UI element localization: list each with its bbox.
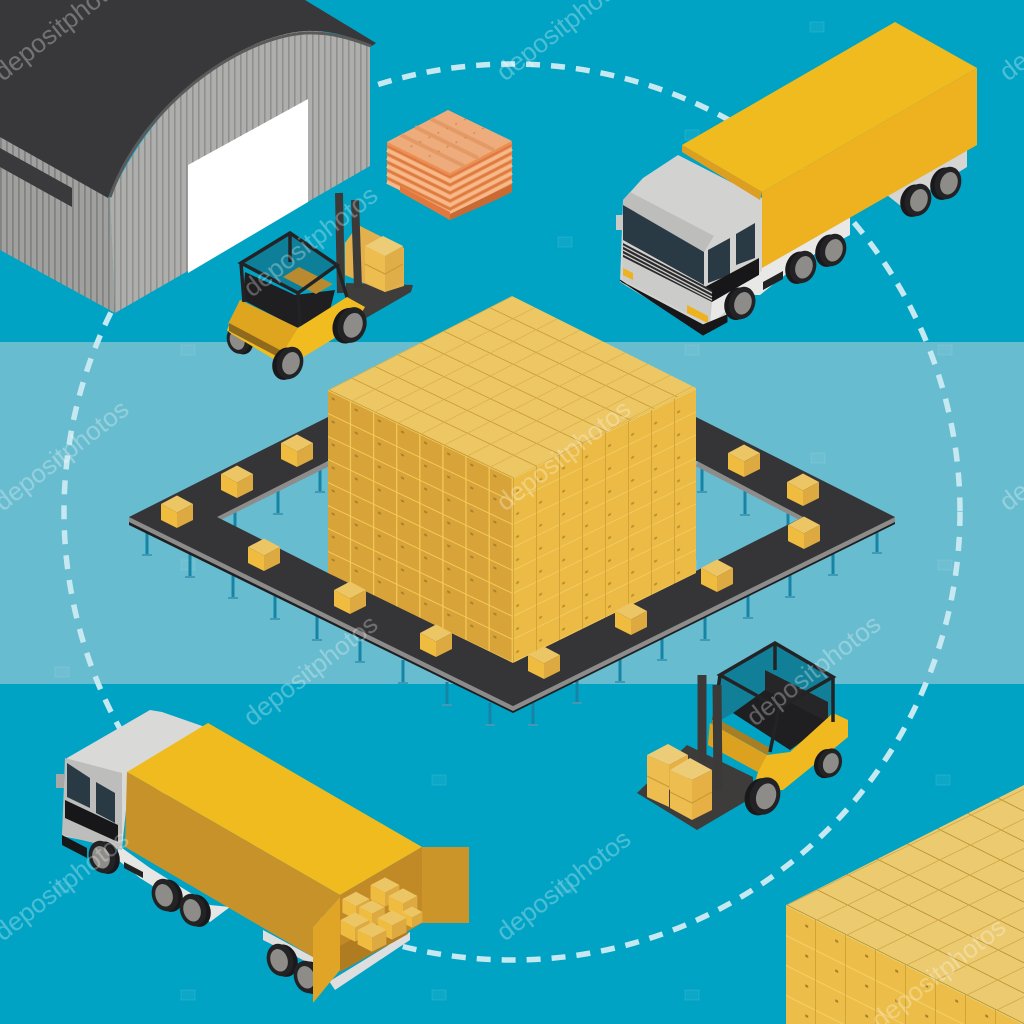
- boxes in truck: [341, 877, 422, 952]
- warehouse door: [188, 99, 308, 273]
- watermarks: depositphotos: [237, 179, 383, 303]
- black stripe: [705, 258, 759, 302]
- windshield: [623, 205, 704, 285]
- cab windows: [67, 763, 115, 823]
- watermarks: depositphotos: [490, 393, 636, 517]
- grille: [623, 243, 712, 302]
- chassis: [118, 845, 230, 922]
- belt surface: [129, 417, 895, 706]
- warehouse roof edge: [110, 33, 371, 197]
- cargo floor: [340, 915, 408, 972]
- wheels: [720, 283, 759, 323]
- boxes on conveyor: [161, 434, 820, 679]
- box: [334, 582, 366, 614]
- cargo box side: [762, 68, 977, 268]
- chassis: [727, 215, 850, 317]
- open right door: [422, 847, 469, 923]
- corner cube of boxes: [786, 785, 1024, 1024]
- warehouse: [0, 0, 376, 313]
- corner cube left face: [786, 905, 1024, 1024]
- cab front: [62, 758, 122, 850]
- forklift bottom: [637, 643, 848, 830]
- cab roof front band: [623, 192, 714, 252]
- backrest: [765, 670, 828, 724]
- headlights: [623, 268, 708, 323]
- cube left face: [328, 390, 513, 663]
- inner rim: [217, 464, 803, 519]
- mast: [339, 193, 358, 293]
- rear chassis: [263, 930, 410, 990]
- stack of pallets: [387, 110, 512, 220]
- open left door: [313, 897, 340, 1003]
- cube top face: [328, 296, 696, 478]
- cargo boxes: [647, 744, 712, 820]
- box: [701, 560, 733, 592]
- box: [788, 516, 820, 549]
- cube right face: [513, 388, 696, 663]
- belt rim strip: [129, 517, 895, 711]
- side windows: [708, 223, 755, 283]
- seat: [733, 690, 828, 750]
- cab base: [620, 155, 762, 333]
- cargo box top: [682, 22, 977, 192]
- lower cab side: [710, 275, 759, 325]
- cab interior dark: [243, 272, 335, 328]
- box: [161, 496, 193, 528]
- rear wheel: [223, 323, 257, 357]
- cab glass: [712, 643, 833, 750]
- warehouse left window: [0, 148, 72, 207]
- fuel tank: [763, 271, 783, 290]
- cargo boxes: [345, 225, 404, 292]
- fork plate: [637, 745, 753, 830]
- box: [728, 444, 760, 477]
- dashed circle route: [64, 64, 960, 960]
- fuel tank: [124, 862, 143, 878]
- cab frame: [241, 233, 347, 326]
- box: [615, 602, 647, 635]
- box: [420, 624, 452, 657]
- cargo box front: [682, 145, 762, 200]
- watermarks: depositphotos: [237, 608, 383, 732]
- belt feet: [142, 492, 882, 725]
- seat orange: [283, 267, 333, 294]
- cab glass: [241, 233, 337, 293]
- cargo interior: [340, 847, 422, 970]
- cab base: [62, 710, 205, 848]
- box: [248, 538, 280, 571]
- cab lower front: [623, 257, 712, 325]
- body: [708, 713, 848, 790]
- box: [787, 474, 819, 506]
- cargo box top: [127, 723, 422, 895]
- truck bottom left: [56, 710, 469, 1003]
- middle band: [0, 342, 1024, 684]
- box: [528, 646, 560, 679]
- wheels: [85, 837, 124, 877]
- wheels: [328, 303, 371, 347]
- cargo box side: [125, 772, 340, 957]
- cab black band: [65, 800, 118, 842]
- fork plate: [345, 283, 413, 318]
- front bumper: [620, 280, 727, 335]
- front wheel: [720, 283, 759, 323]
- conveyor belt: [129, 417, 895, 725]
- watermarks: depositphotos: [490, 823, 636, 947]
- bumper: [62, 835, 87, 858]
- mirror: [616, 215, 623, 230]
- body: [227, 297, 365, 367]
- forklift top: [223, 193, 413, 383]
- warehouse left wall: [0, 137, 115, 313]
- mast: [702, 675, 718, 790]
- large cube of boxes: [328, 296, 696, 663]
- corner cube top face: [786, 785, 1024, 1024]
- watermarks: depositphotos: [740, 608, 886, 732]
- warehouse front wall: [110, 30, 370, 313]
- warehouse roof: [0, 0, 376, 198]
- cab frame: [714, 643, 833, 752]
- wheels: [810, 745, 846, 781]
- belt rim underside: [129, 517, 895, 713]
- mirror: [56, 774, 64, 788]
- truck top right: [616, 22, 977, 335]
- rear chassis: [887, 145, 967, 207]
- box: [221, 466, 253, 498]
- box: [281, 434, 313, 467]
- belt legs: [147, 465, 877, 725]
